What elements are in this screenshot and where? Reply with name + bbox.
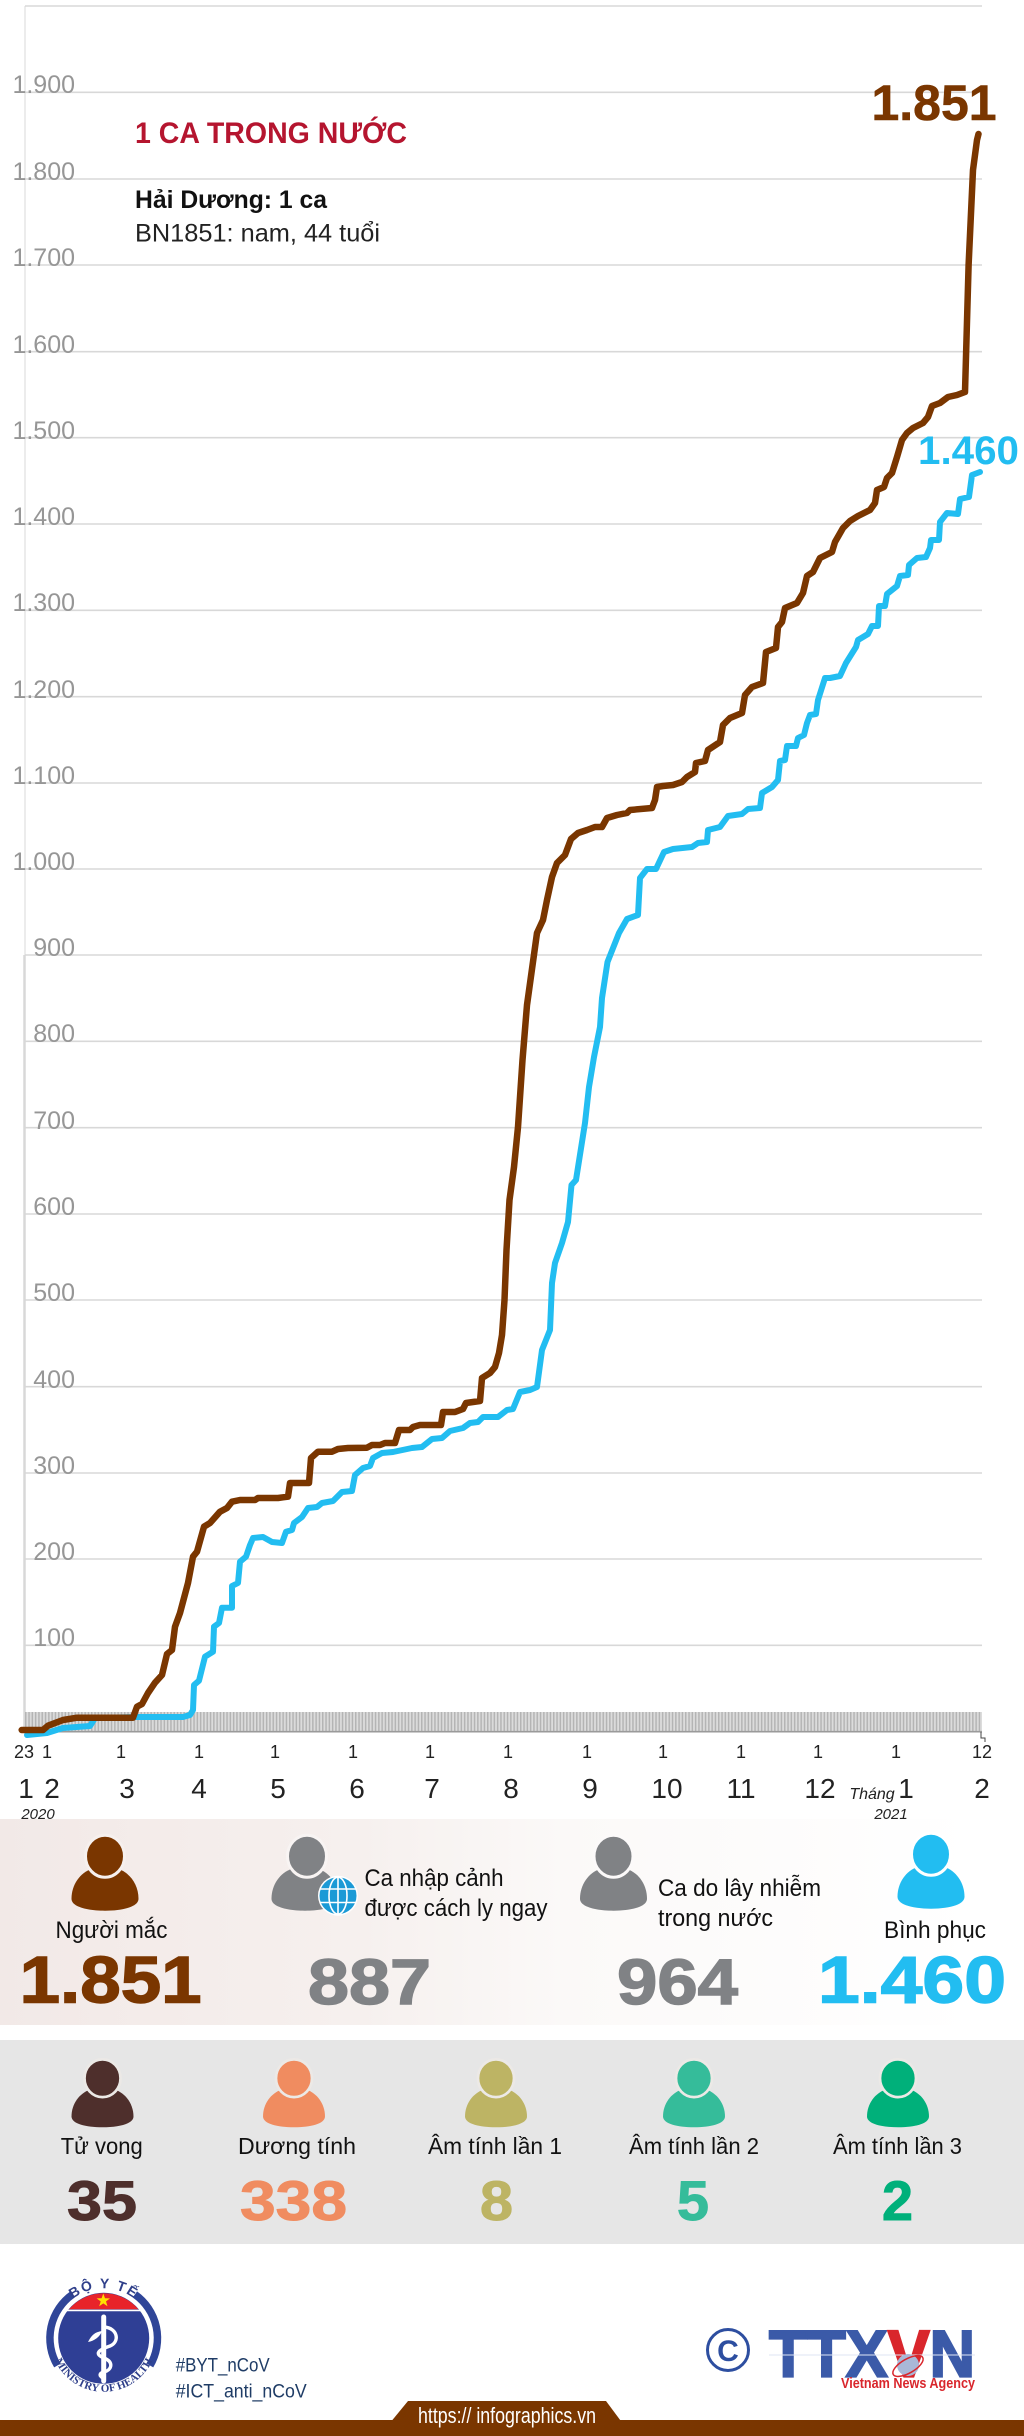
day axis labels: 1 [270, 1742, 280, 1762]
y axis labels: 1.700 [12, 244, 75, 272]
panel: secondary totals [0, 2040, 1024, 2244]
stat: deaths: Tử vong [61, 2133, 143, 2159]
heading: 1 CA TRONG NƯỚC [135, 116, 407, 150]
year labels [20, 1806, 908, 1823]
y axis labels: 600 [33, 1193, 75, 1221]
month axis labels: 6 [349, 1773, 365, 1804]
month axis labels: 12 [804, 1773, 836, 1804]
day axis labels: 23 [14, 1742, 34, 1762]
day axis labels: 1 [891, 1742, 901, 1762]
year labels: 2020 [20, 1806, 55, 1823]
month axis labels: 1 [898, 1773, 914, 1804]
logo: TTXVN: Vietnam News Agency [841, 2375, 976, 2392]
y axis labels: 1.000 [12, 848, 75, 876]
month axis labels: 8 [503, 1773, 519, 1804]
stat: negative three times: 2 [882, 2169, 913, 2232]
hatched band [25, 1712, 985, 1742]
y axis labels: 900 [33, 934, 75, 962]
stat: positive: 338 [240, 2169, 347, 2232]
label: domestic cases [658, 1875, 821, 1932]
month axis labels: 5 [270, 1773, 286, 1804]
line: cases [22, 134, 978, 1730]
y axis labels: 400 [33, 1366, 75, 1394]
month axis labels: 10 [651, 1773, 683, 1804]
stat: deaths: 35 [67, 2169, 137, 2232]
month axis labels: 11 [726, 1773, 756, 1804]
label: domestic cases: trong nước [658, 1905, 773, 1932]
number: imported cases: 887 [308, 1946, 431, 2018]
day axis labels [14, 1742, 992, 1762]
day axis labels: 1 [813, 1742, 823, 1762]
day axis labels: 1 [348, 1742, 358, 1762]
hashtags: #BYT_nCoV [176, 2356, 270, 2377]
stat: negative once [428, 2059, 562, 2232]
number: domestic cases: 964 [617, 1946, 738, 2018]
month axis labels: 7 [424, 1773, 440, 1804]
icon: copyright: C [717, 2335, 739, 2368]
text block: province: Hải Dương: 1 ca [135, 186, 328, 214]
stat: negative once: Âm tính lần 1 [428, 2133, 562, 2159]
label: imported cases: được cách ly ngay [364, 1895, 548, 1922]
number: recovered: 1.460 [818, 1943, 1006, 2017]
footer bar [0, 2401, 1024, 2436]
value label: cases: 1.851 [871, 75, 997, 131]
day axis labels: 1 [194, 1742, 204, 1762]
y axis labels: 800 [33, 1020, 75, 1048]
line: recovered [27, 472, 980, 1735]
number: cases: 1.851 [20, 1943, 202, 2017]
icon: person blue [898, 1833, 964, 1909]
logo: ministry of health [46, 2278, 162, 2392]
month axis labels: 2 [44, 1773, 60, 1804]
month axis labels: 1 [18, 1773, 34, 1804]
label: recovered: Bình phục [884, 1917, 986, 1944]
logo: ministry of health: MINISTRY OF HEALTH [55, 2357, 152, 2392]
month axis labels: 3 [119, 1773, 135, 1804]
y axis labels: 1.100 [12, 762, 75, 790]
label: imported cases: Ca nhập cảnh [364, 1865, 504, 1892]
day axis labels: 1 [582, 1742, 592, 1762]
stat: negative twice: 5 [677, 2169, 709, 2232]
day axis labels: 1 [503, 1742, 513, 1762]
stat: positive: Dương tính [238, 2133, 356, 2159]
day axis labels: 1 [425, 1742, 435, 1762]
grid lines [24, 6, 982, 1731]
logo: TTXVN: TTXVN [769, 2317, 975, 2391]
stat: negative once: 8 [480, 2169, 513, 2232]
label: domestic cases: Ca do lây nhiễm [658, 1875, 821, 1902]
y axis labels: 300 [33, 1452, 75, 1480]
icon: person gray [580, 1835, 647, 1911]
y axis labels: 1.900 [12, 71, 75, 99]
y axis labels: 700 [33, 1107, 75, 1135]
hashtags [176, 2356, 307, 2403]
month caption: Tháng [849, 1786, 895, 1803]
y axis labels: 1.200 [12, 676, 75, 704]
stat: deaths [61, 2059, 143, 2232]
y axis labels: 1.500 [12, 417, 75, 445]
day axis labels: 1 [42, 1742, 52, 1762]
icon: person brown [72, 1835, 138, 1911]
label: imported cases [364, 1865, 548, 1922]
month axis labels: 4 [191, 1773, 207, 1804]
y axis labels: 200 [33, 1538, 75, 1566]
y axis labels: 1.300 [12, 589, 75, 617]
y axis labels: 100 [33, 1624, 75, 1652]
icon: person gray with globe [272, 1835, 358, 1916]
line chart [12, 6, 1019, 1823]
stat: positive [238, 2059, 356, 2232]
month axis labels: 9 [582, 1773, 598, 1804]
stat: negative twice: Âm tính lần 2 [629, 2133, 759, 2159]
day axis labels: 12 [972, 1742, 992, 1762]
panel: main totals [0, 1819, 1024, 2025]
y axis labels: 1.400 [12, 503, 75, 531]
label: cases: Người mắc [56, 1917, 168, 1944]
day axis labels: 1 [116, 1742, 126, 1762]
year labels: 2021 [873, 1806, 908, 1823]
y axis labels: 1.600 [12, 331, 75, 359]
month axis labels: 2 [974, 1773, 990, 1804]
y axis labels [12, 71, 75, 1652]
value label: recovered: 1.460 [918, 429, 1019, 473]
month axis labels [18, 1773, 990, 1804]
stat: negative three times: Âm tính lần 3 [833, 2133, 962, 2159]
day axis labels: 1 [658, 1742, 668, 1762]
icon: copyright [708, 2330, 748, 2370]
footer url: https:// infographics.vn [418, 2403, 596, 2428]
day axis labels: 1 [736, 1742, 746, 1762]
hashtags: #ICT_anti_nCoV [176, 2382, 307, 2403]
logo: ministry of health: BỘ Y TẾ [68, 2278, 140, 2298]
y axis labels: 500 [33, 1279, 75, 1307]
y axis labels: 1.800 [12, 158, 75, 186]
stat: negative three times [833, 2059, 962, 2232]
stat: negative twice [629, 2059, 759, 2232]
text block: patient: BN1851: nam, 44 tuổi [135, 220, 380, 248]
